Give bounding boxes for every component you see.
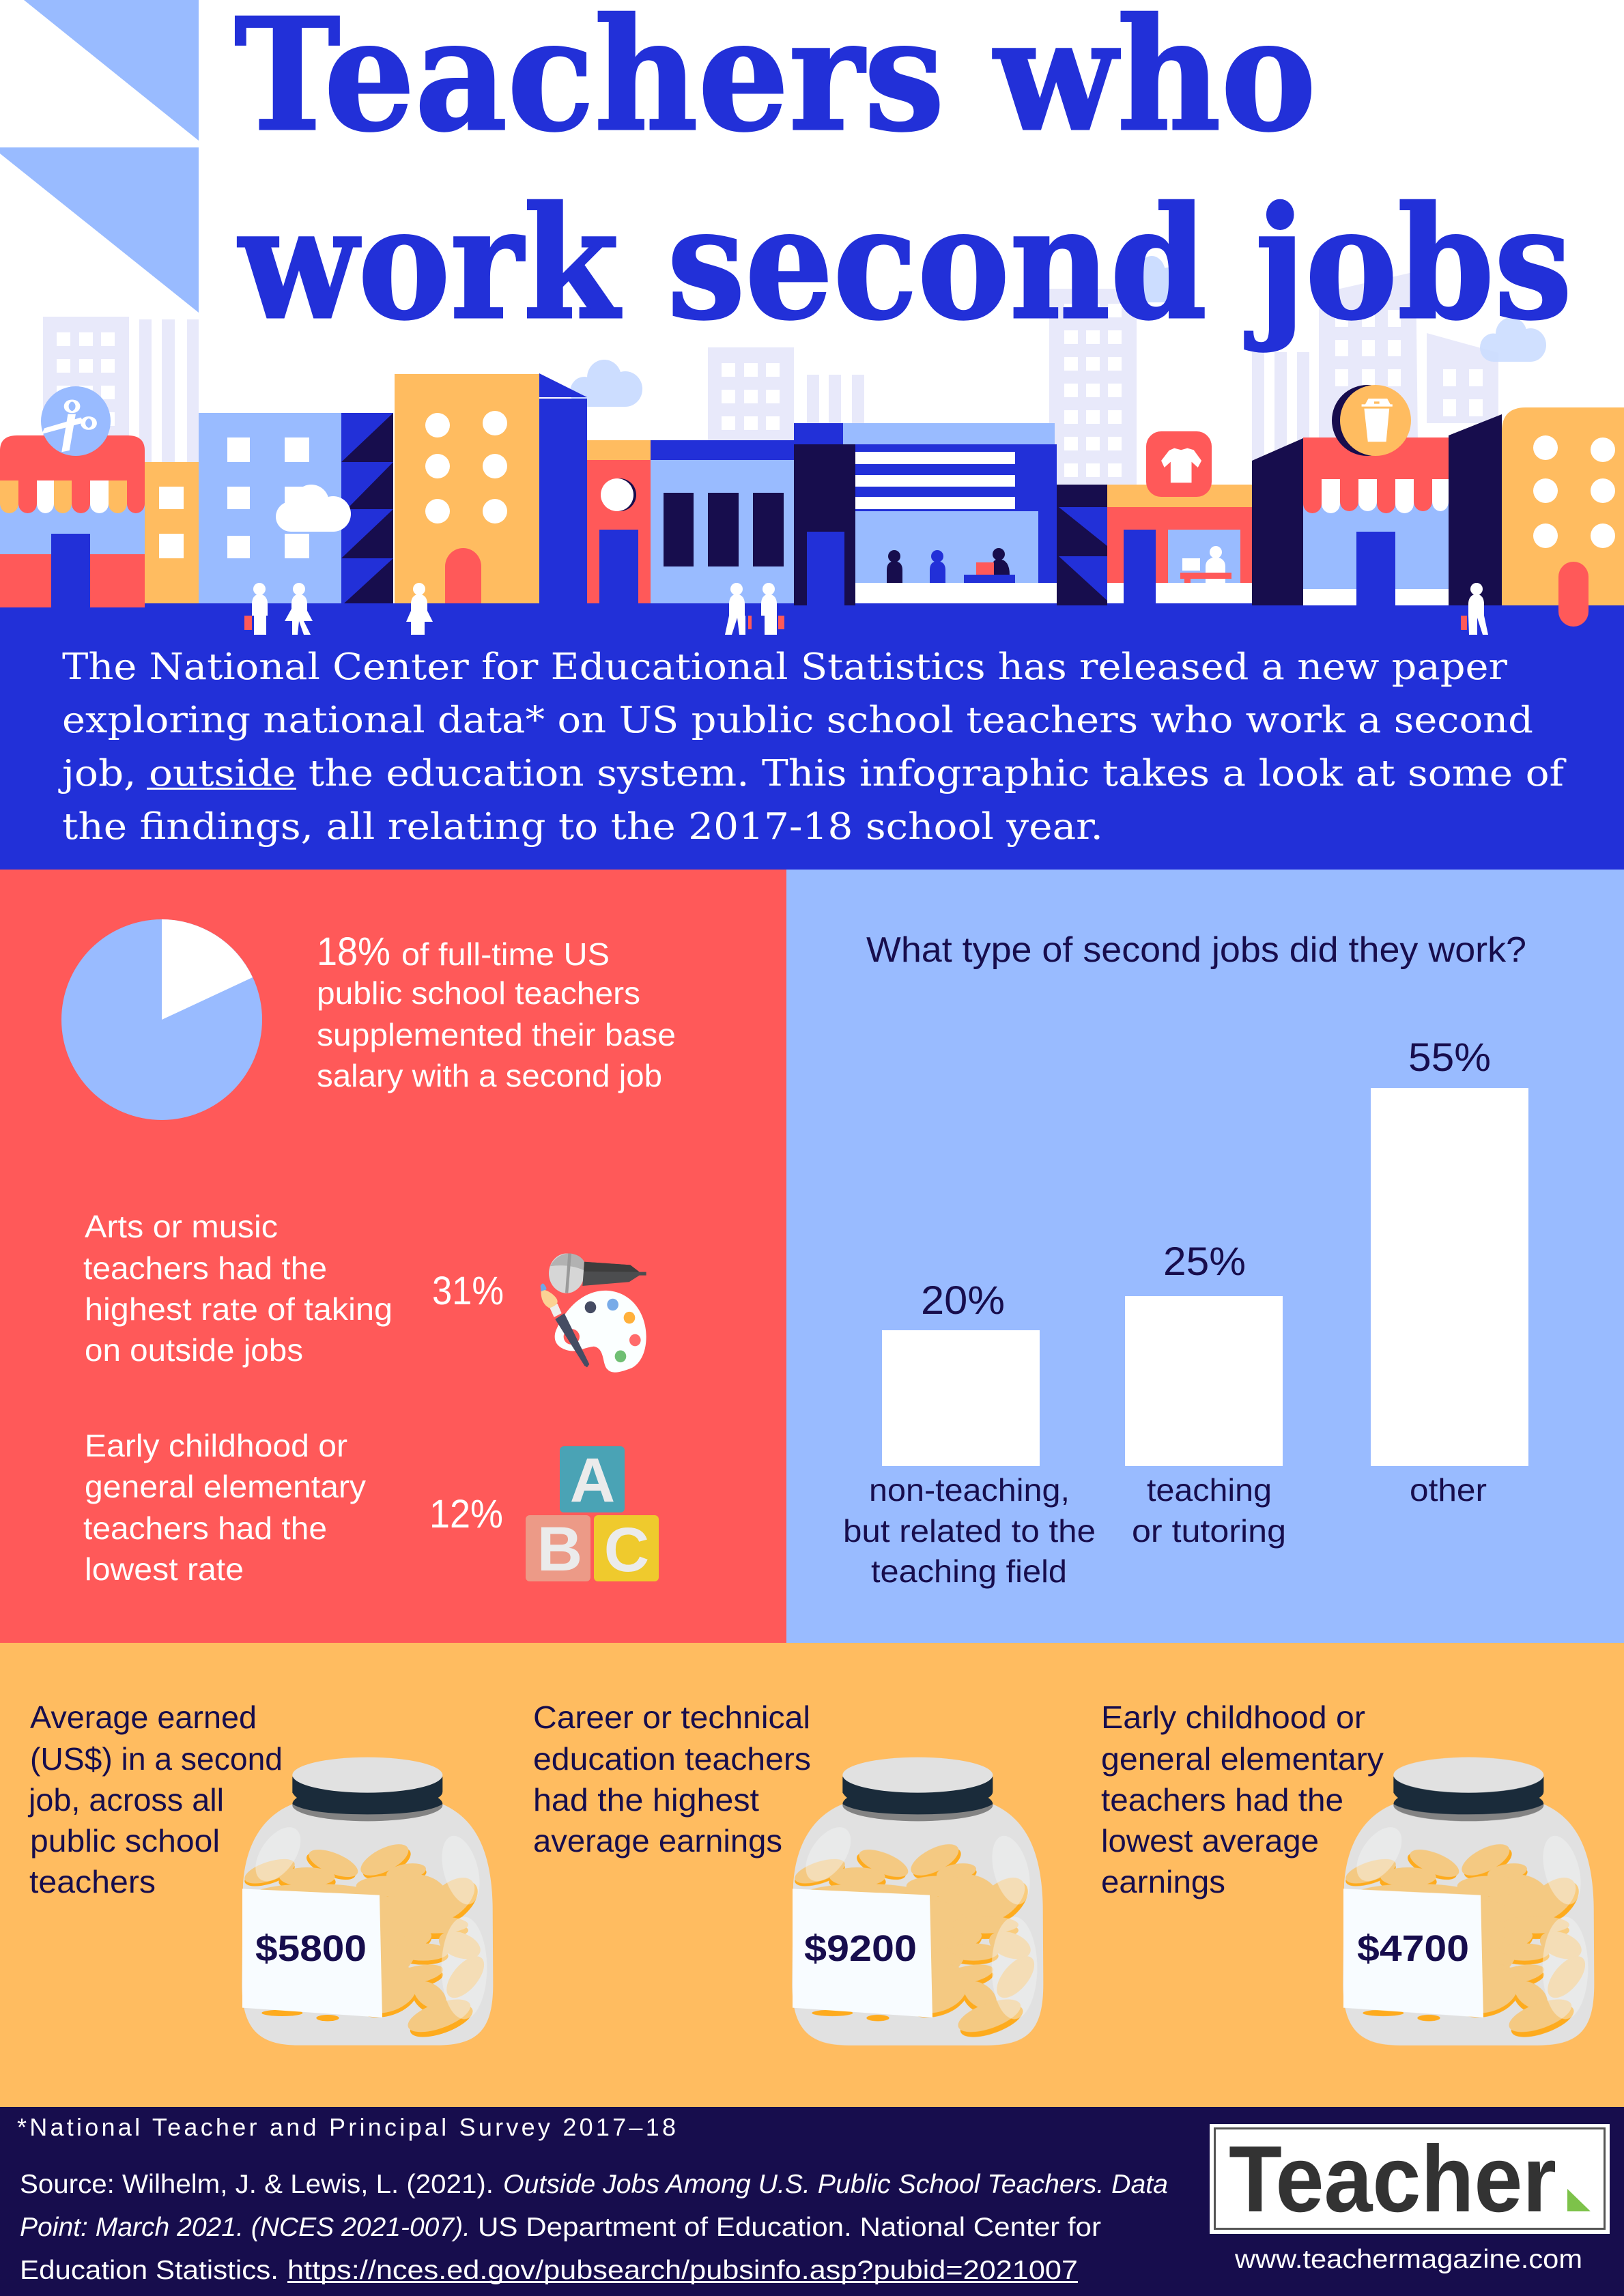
arts text: highest rate of taking — [85, 1291, 393, 1327]
source citation: Education Statistics. — [20, 2256, 279, 2285]
arts text: teachers had the — [83, 1250, 327, 1286]
jar $4700 — [1343, 1757, 1594, 2046]
earnings text column 3: general elementary — [1101, 1741, 1384, 1777]
earnings text column 2: education teachers — [533, 1741, 811, 1777]
bar: non-teaching 20% — [843, 1278, 1096, 1589]
top-left triangles — [0, 0, 199, 313]
intro text — [57, 646, 1567, 848]
earnings text column 1: public school — [30, 1823, 220, 1859]
central school building — [794, 423, 1057, 605]
footer — [0, 2107, 1624, 2296]
earnings text column 3: teachers had the — [1101, 1782, 1343, 1818]
panel: earnings — [0, 1643, 1624, 2107]
navy wall right — [1449, 414, 1502, 605]
icon: microphone and palette — [541, 1253, 646, 1373]
icon: ABC blocks: B — [537, 1515, 582, 1584]
18% text: salary with a second job — [317, 1058, 662, 1093]
navy triangle facade right — [1057, 485, 1107, 605]
jar $5800 — [242, 1757, 493, 2046]
earnings text column 2: average earnings — [533, 1823, 782, 1859]
blue building with navy windows — [651, 440, 794, 603]
panel: red statistics — [0, 870, 786, 1643]
bar: teaching 25%: teaching — [1147, 1472, 1272, 1508]
earnings text column 1 — [27, 1699, 283, 1899]
white cloud — [276, 485, 351, 532]
bar: teaching 25%: or tutoring — [1132, 1513, 1286, 1549]
bar: other 55%: other — [1410, 1472, 1487, 1508]
early childhood text: general elementary — [85, 1469, 366, 1504]
bar: teaching 25% — [1125, 1239, 1286, 1549]
early childhood text: teachers had the — [83, 1510, 327, 1546]
bar: non-teaching 20%: teaching field — [871, 1553, 1067, 1589]
source citation: Outside Jobs Among U.S. Public School Teachers. Data — [503, 2170, 1168, 2199]
icon: ABC blocks — [526, 1446, 659, 1585]
jar $5800: $5800 — [255, 1928, 367, 1969]
31%: 31% — [432, 1269, 504, 1313]
earnings text column 1: job, across all — [27, 1782, 224, 1818]
foreground buildings — [0, 373, 1624, 627]
earnings text column 1: teachers — [29, 1864, 156, 1899]
earnings text column 1: Average earned — [30, 1699, 257, 1735]
jar $9200: $9200 — [804, 1928, 917, 1969]
survey footnote: *National Teacher and Principal Survey 2017–18 — [17, 2113, 676, 2141]
tall orange building — [395, 374, 539, 603]
earnings text column 3: earnings — [1101, 1864, 1225, 1899]
arts text — [83, 1209, 393, 1368]
icon: ABC blocks: C — [604, 1515, 649, 1585]
website: www.teachermagazine.com — [1234, 2245, 1582, 2274]
earnings text column 3: lowest average — [1101, 1823, 1319, 1859]
earnings text column 2 — [533, 1699, 811, 1859]
red building with round window — [587, 440, 651, 603]
arts text: Arts or music — [85, 1209, 278, 1244]
source citation: Point: March 2021. (NCES 2021-007). — [20, 2213, 470, 2242]
chart title: What type of second jobs did they work? — [866, 930, 1526, 970]
title — [234, 0, 1572, 354]
earnings text column 3 — [1101, 1699, 1384, 1899]
source citation: https://nces.ed.gov/pubsearch/pubsinfo.asp?pubid=2021007 — [287, 2256, 1078, 2285]
source citation: Source: Wilhelm, J. & Lewis, L. (2021). — [20, 2170, 494, 2199]
bar: other 55%: 55% — [1408, 1035, 1491, 1080]
Teacher logo: Teacher — [1229, 2127, 1556, 2232]
earnings text column 2: Career or technical — [533, 1699, 810, 1735]
bar: non-teaching 20%: 20% — [921, 1278, 1005, 1323]
intro text: job, outside the education system. This infographic takes a look at some of — [57, 753, 1567, 794]
bar: other 55% — [1371, 1035, 1528, 1508]
blue tower — [539, 373, 587, 603]
18% text — [317, 930, 676, 1093]
jar $4700: $4700 — [1357, 1928, 1469, 1969]
bar: non-teaching 20%: non-teaching, — [869, 1472, 1070, 1508]
icon: ABC blocks: A — [570, 1446, 615, 1515]
shop with scissors sign — [0, 386, 145, 607]
bar: teaching 25%: 25% — [1163, 1239, 1246, 1284]
background city skyline — [43, 272, 1498, 486]
jar $9200 — [792, 1757, 1043, 2046]
coffee shop — [1303, 385, 1449, 605]
panel: second job types bar chart — [786, 870, 1624, 1643]
source citation: US Department of Education. National Center for — [478, 2213, 1101, 2242]
navy triangle facade — [341, 413, 393, 603]
light clouds — [570, 256, 1546, 407]
clothing shop — [1107, 431, 1253, 603]
blue building — [199, 413, 341, 603]
right orange building — [1502, 407, 1624, 627]
18% text: of full-time US — [401, 936, 610, 972]
orange building — [145, 462, 199, 603]
intro text: exploring national data* on US public school teachers who work a second — [62, 700, 1533, 741]
18% text: 18% — [317, 930, 390, 974]
intro text: The National Center for Educational Statistics has released a new paper — [62, 646, 1508, 688]
early childhood text: Early childhood or — [85, 1428, 347, 1463]
earnings text column 1: (US$) in a second — [30, 1741, 283, 1777]
street band with intro panel — [0, 603, 1624, 870]
pedestrians — [244, 583, 1488, 635]
bar: non-teaching 20%: but related to the — [843, 1513, 1096, 1549]
source citation — [20, 2170, 1168, 2285]
intro text: the findings, all relating to the 2017-18 school year. — [62, 806, 1103, 848]
earnings text column 3: Early childhood or — [1101, 1699, 1365, 1735]
early childhood text — [83, 1428, 366, 1587]
earnings text column 2: had the highest — [533, 1782, 759, 1818]
navy side wall — [1252, 438, 1303, 605]
early childhood text: lowest rate — [85, 1551, 244, 1587]
12%: 12% — [429, 1492, 503, 1536]
pie chart 18% — [61, 919, 262, 1120]
18% text: supplemented their base — [317, 1017, 676, 1052]
18% text: public school teachers — [317, 975, 640, 1011]
arts text: on outside jobs — [85, 1332, 303, 1368]
